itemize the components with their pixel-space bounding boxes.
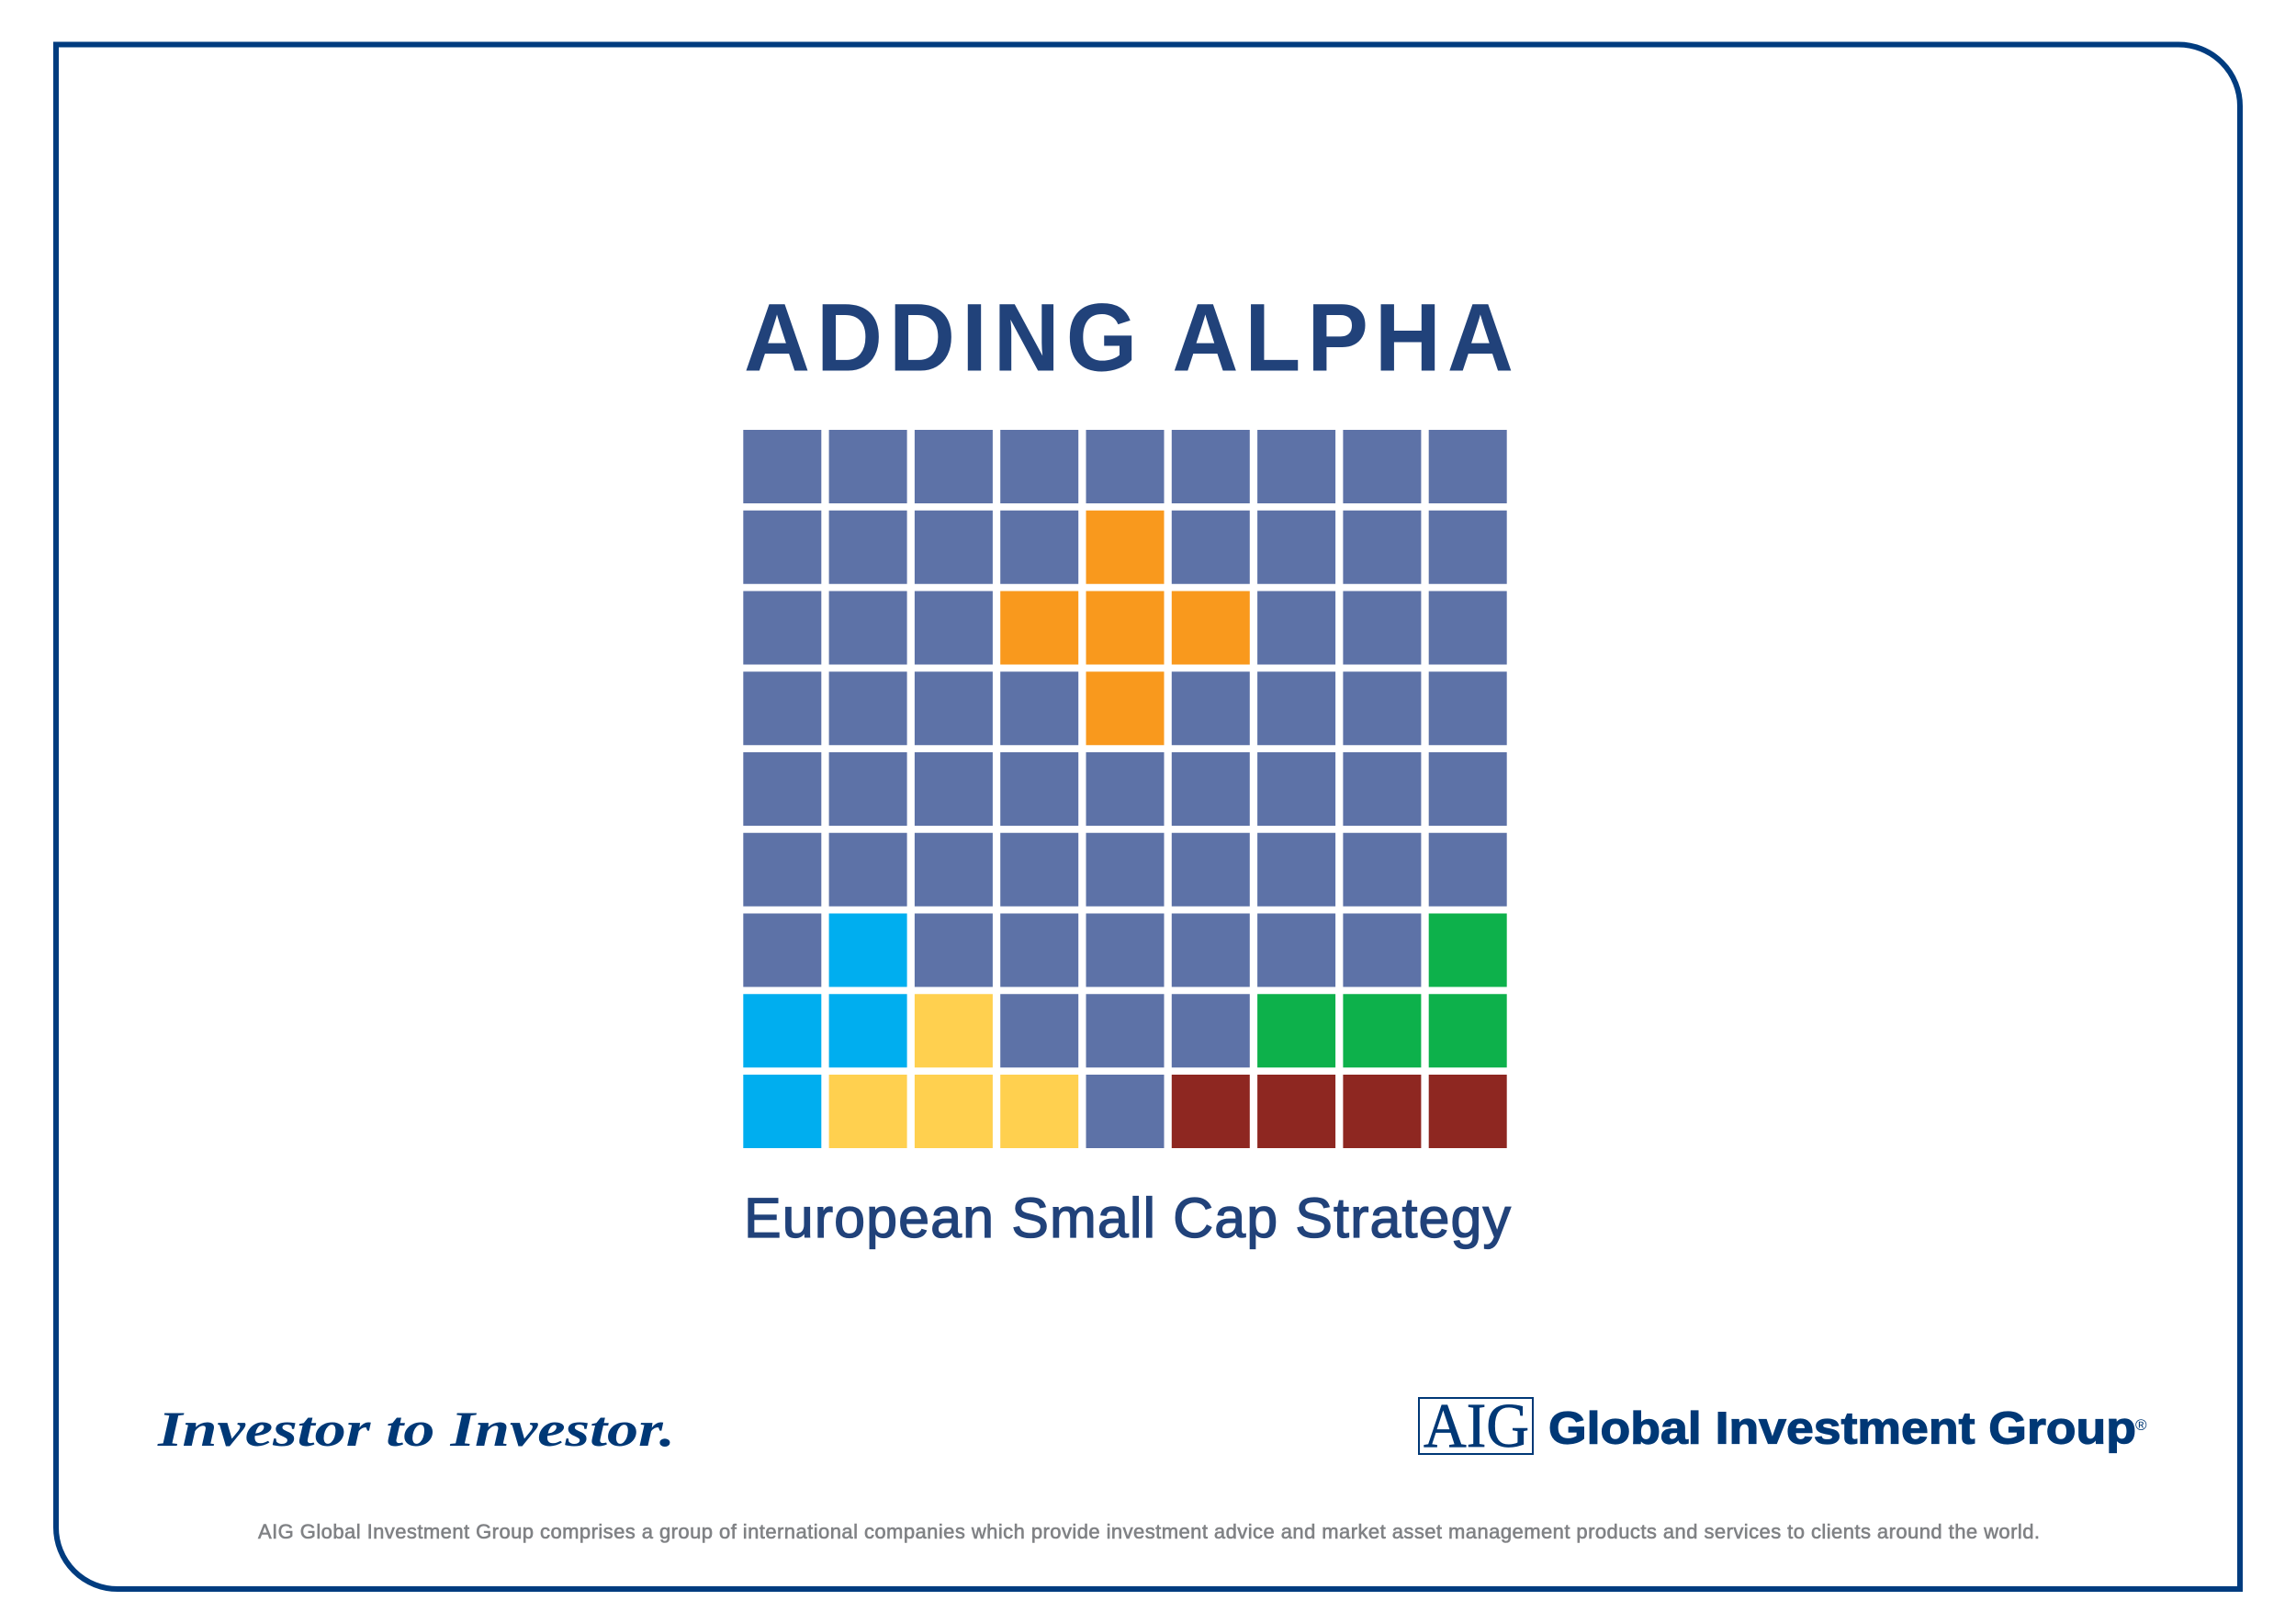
logo box: [1419, 1398, 1533, 1454]
title: ADDING ALPHA: [744, 283, 1514, 391]
tagline: Investor to Investor.: [157, 1402, 675, 1457]
logo: AIG Global Investment Group: [1419, 1391, 2147, 1460]
subtitle: European Small Cap Strategy: [744, 1187, 1512, 1249]
logo letters: AIG: [1424, 1391, 1529, 1460]
disclaimer: AIG Global Investment Group comprises a group of international companies which provide investment advice and market asset management products and services to clients around the world.: [258, 1520, 2040, 1543]
tile grid: [743, 430, 1507, 1148]
registered mark: ®: [2135, 1416, 2147, 1434]
logo wordmark: Global Investment Group: [1548, 1403, 2136, 1453]
